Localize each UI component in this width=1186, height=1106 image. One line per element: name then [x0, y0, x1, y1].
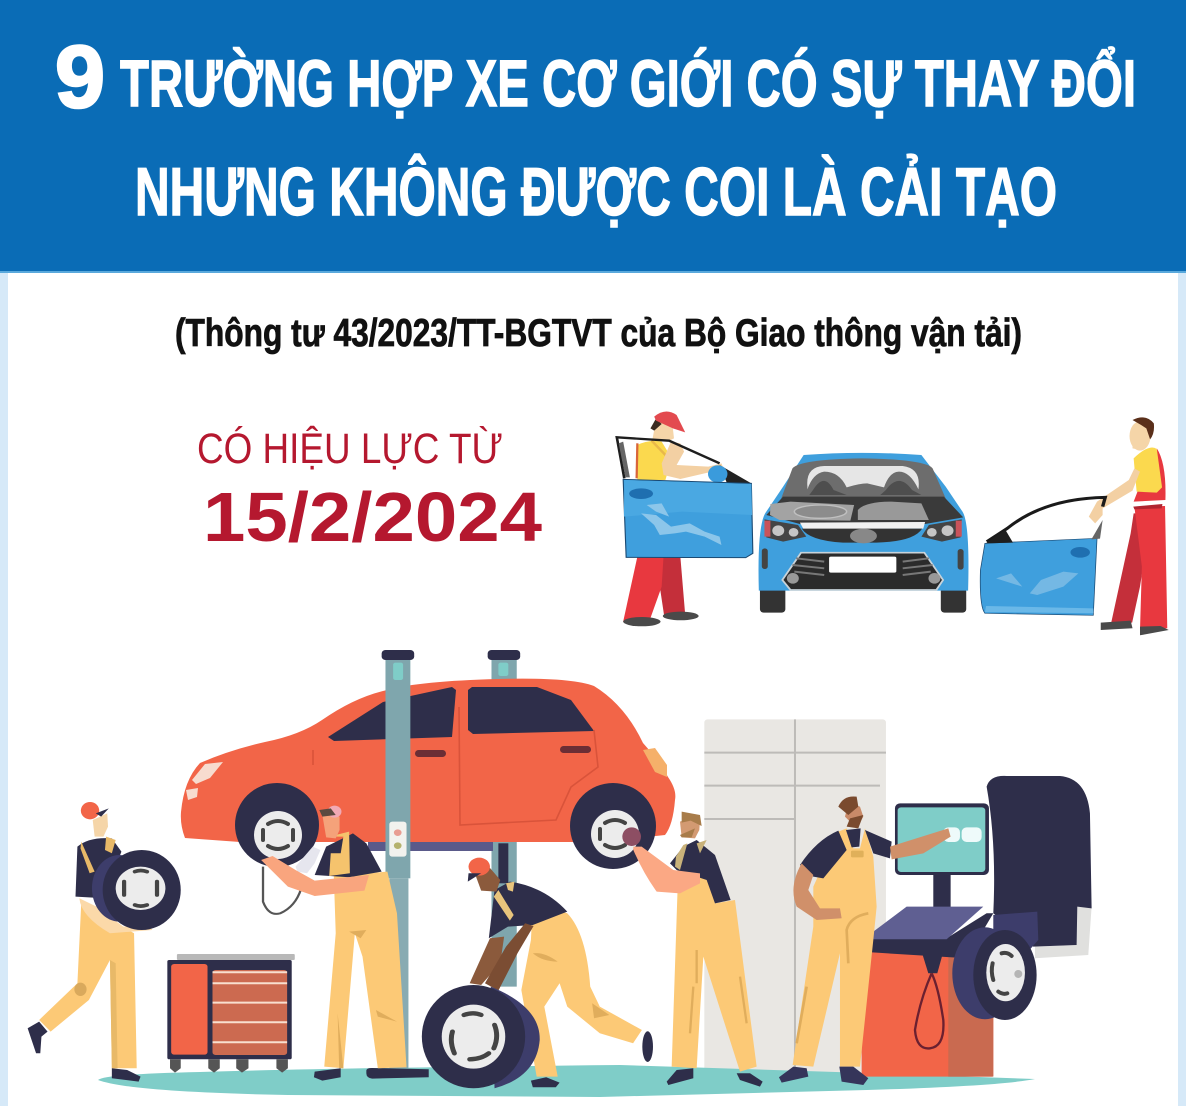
car windows [328, 687, 594, 741]
right worker holding door [980, 417, 1169, 635]
rolling worker back foot [642, 1031, 653, 1062]
illustration: workers fitting doors on blue car [617, 412, 1169, 635]
workshop right side: workers and wheel balancer [622, 776, 1092, 1087]
front lift post [366, 650, 429, 1079]
red car on lift [181, 679, 675, 869]
worker rolling tyre [422, 858, 642, 1088]
mechanic at rear wheel [633, 812, 763, 1087]
worker checking wheel [261, 806, 407, 1081]
left worker holding door [617, 412, 753, 626]
workshop left side: post, workers, cabinet [28, 650, 642, 1088]
ground [98, 1065, 1035, 1097]
effective date: 15/2/2024 [203, 478, 542, 556]
wall panel background [704, 719, 886, 1073]
worker carrying tyre [28, 802, 181, 1082]
mechanic at monitor [779, 796, 951, 1085]
title banner [0, 0, 1186, 273]
rear wheel [570, 783, 656, 869]
wheel balancer machine [862, 776, 1092, 1077]
tool cabinet [167, 954, 295, 1073]
effective date label: CÓ HIỆU LỰC TỪ [197, 425, 503, 473]
front wheel [235, 783, 319, 867]
title number 9: 9 [55, 27, 105, 126]
blue car front view [759, 453, 968, 613]
hand on wheel [622, 827, 641, 846]
back lift post [488, 650, 520, 987]
